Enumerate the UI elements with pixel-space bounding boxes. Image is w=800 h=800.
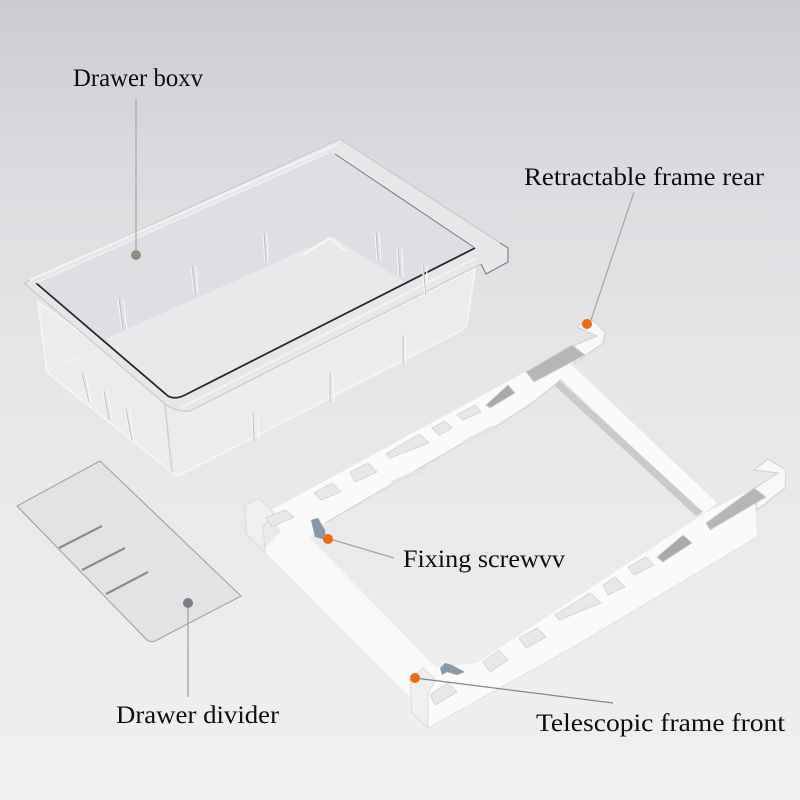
label: Drawer boxv: Drawer boxv <box>73 65 203 92</box>
tabs under far rail <box>392 427 494 483</box>
divider slots <box>81 232 427 442</box>
label: Drawer divider: Drawer divider <box>116 702 280 729</box>
panel: drawer divider <box>17 461 241 642</box>
handle edge <box>481 243 508 274</box>
dot: fixing screw <box>323 534 333 544</box>
rail slots and springs <box>266 345 766 705</box>
far rail <box>266 345 580 545</box>
dot: telescopic frame front <box>410 673 420 683</box>
divider slots <box>59 526 148 594</box>
rim <box>24 139 508 411</box>
interior floor seen through opening <box>108 237 404 396</box>
rear bar <box>557 365 717 514</box>
front bar plate <box>263 520 445 728</box>
label: Telescopic frame front: Telescopic frame front <box>536 710 785 737</box>
label line: telescopic frame front <box>410 673 613 703</box>
label: Fixing screwvv: Fixing screwvv <box>403 546 566 573</box>
panel: telescopic frame <box>245 318 786 728</box>
dot: retractable frame rear <box>582 319 592 329</box>
label line: retractable frame rear <box>582 192 634 329</box>
near hook <box>754 459 786 510</box>
label line: fixing screw <box>323 534 394 558</box>
black gasket <box>36 248 475 398</box>
front end caps <box>245 498 274 552</box>
rear hook <box>575 318 605 363</box>
icon: fixing screws <box>311 518 326 540</box>
near rail <box>410 488 757 728</box>
panel: drawer box <box>24 139 508 480</box>
dot: drawer box <box>131 250 141 260</box>
label: Retractable frame rear: Retractable frame rear <box>524 164 765 191</box>
dot: drawer divider <box>183 598 193 608</box>
label line: drawer box <box>131 100 141 260</box>
label line: drawer divider <box>183 598 193 697</box>
inner opening <box>36 153 475 398</box>
drawer body <box>38 268 475 475</box>
